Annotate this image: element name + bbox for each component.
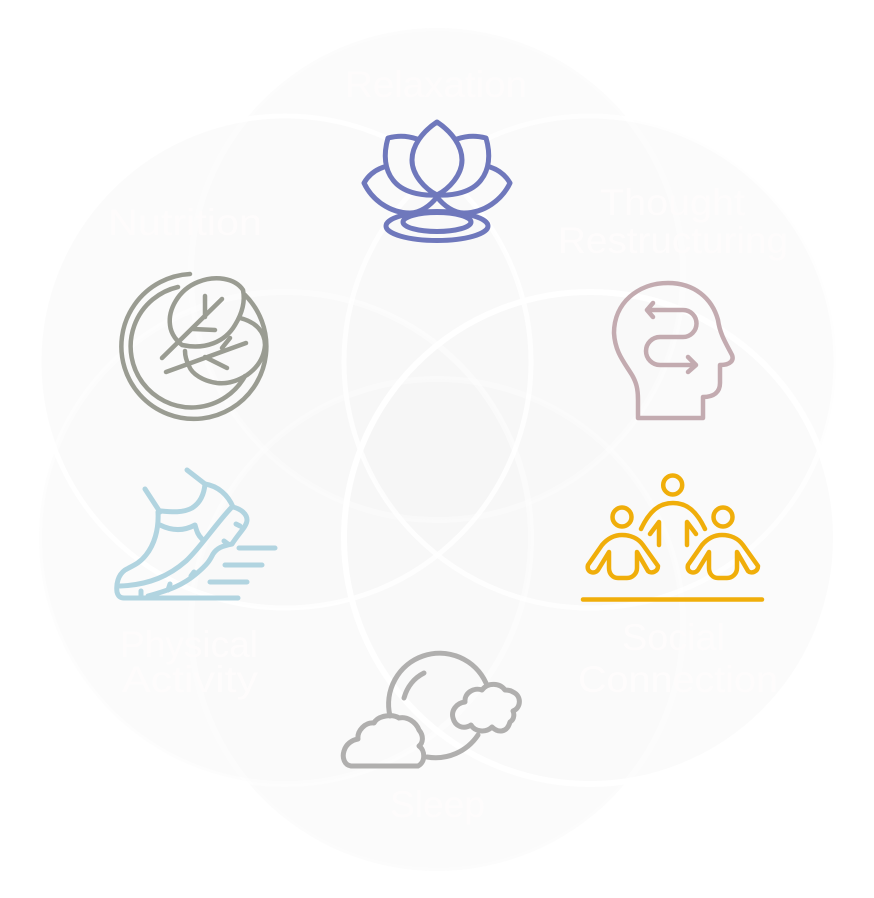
heading: Thought Restructuring: Thought: [600, 182, 746, 223]
heading: Relaxation: Relaxation: [345, 64, 527, 105]
heading: Social Connection: [578, 617, 778, 700]
heading: Physical Activity: Physical: [120, 624, 258, 665]
heading: Social Connection: Social: [622, 617, 725, 658]
heading: Social Connection: Connection: [578, 659, 778, 700]
heading: Physical Activity: [120, 624, 259, 700]
icon: head with arrows: [614, 283, 733, 418]
heading: Thought Restructuring: Restructuring: [558, 220, 788, 261]
icon: moon and clouds: [343, 653, 519, 766]
heading: Sleep: Sleep: [390, 784, 485, 825]
heading: Nutrition: Nutrition: [108, 202, 262, 243]
heading: Physical Activity: Activity: [122, 659, 259, 700]
heading: Thought Restructuring: [558, 182, 788, 261]
icon: leaves on plate: [121, 274, 266, 419]
icon: running shoe: [117, 470, 275, 598]
icon: three people: [583, 476, 762, 600]
icon: lotus: [364, 122, 510, 240]
